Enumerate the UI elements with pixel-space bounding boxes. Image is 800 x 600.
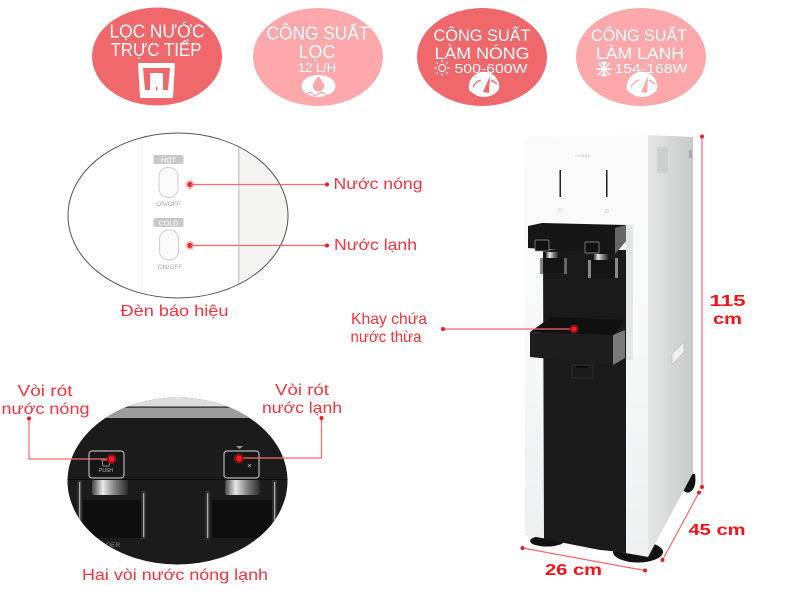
badge: công suất làm lạnh: LÀM LẠNH bbox=[596, 44, 684, 63]
cabinet side bbox=[648, 135, 693, 557]
badge: công suất lọc: CÔNG SUẤT bbox=[266, 22, 370, 44]
icon: snowflake bbox=[596, 61, 612, 77]
feet bbox=[530, 474, 695, 562]
badge: công suất làm nóng bbox=[417, 8, 547, 106]
label: vòi rót nước nóng bbox=[2, 383, 116, 464]
callout: nước nóng bbox=[186, 176, 422, 193]
faucet right bbox=[205, 446, 277, 540]
panel shadow bbox=[626, 225, 633, 360]
callout: khay chứa nước thừa bbox=[350, 311, 578, 346]
drip tray bbox=[530, 317, 625, 378]
callout: khay chứa nước thừa: Khay chứa bbox=[351, 311, 427, 328]
dimension: height 115 cm: 115 bbox=[710, 293, 746, 310]
panel: faucet zoom circle bbox=[68, 398, 288, 564]
icon: water filter bbox=[138, 63, 175, 98]
label: vòi rót nước lạnh: Vòi rót bbox=[275, 382, 330, 399]
badge: công suất làm nóng: CÔNG SUẤT bbox=[434, 26, 530, 45]
badge: công suất làm nóng: 500-600W bbox=[454, 61, 528, 76]
callout: nước lạnh bbox=[186, 237, 417, 254]
dimension: width 26 cm: 26 cm bbox=[545, 562, 602, 579]
dimension: width 26 cm bbox=[520, 546, 647, 579]
indicator slits bbox=[558, 170, 608, 212]
dimension: height 115 cm bbox=[700, 134, 746, 489]
hot indicator button: ON/OFF bbox=[156, 201, 181, 208]
badge: công suất làm nóng: LÀM NÓNG bbox=[434, 44, 530, 63]
icon: gauge bbox=[469, 72, 499, 97]
faucet left: PUSH bbox=[99, 468, 113, 474]
caption: hai vòi nước nóng lạnh: Hai vòi nước nóng lạnh bbox=[82, 567, 268, 584]
callout: nước nóng: Nước nóng bbox=[334, 176, 422, 193]
callout: nước lạnh: Nước lạnh bbox=[334, 237, 417, 254]
icon: gauge bbox=[627, 72, 657, 97]
caption: đèn báo hiệu: Đèn báo hiệu bbox=[120, 303, 228, 320]
badge: công suất làm lạnh bbox=[576, 8, 706, 106]
panel: đèn báo hiệu zoom circle bbox=[68, 133, 299, 299]
cold indicator button: ON/OFF bbox=[158, 264, 182, 271]
cold indicator button bbox=[154, 218, 184, 271]
black front panel bbox=[543, 250, 626, 553]
cabinet front bbox=[524, 135, 648, 557]
icon: sun bbox=[434, 60, 450, 76]
badge: công suất lọc: LỌC bbox=[298, 42, 336, 62]
badge: công suất làm lạnh: 154-168W bbox=[614, 61, 688, 76]
product: water purifier bbox=[524, 135, 695, 562]
dimension: height 115 cm: cm bbox=[713, 311, 742, 328]
callout: khay chứa nước thừa: nước thừa bbox=[350, 329, 422, 346]
label: vòi rót nước lạnh: nước lạnh bbox=[262, 400, 342, 417]
badge: lọc nước trực tiếp: TRỰC TIẾP bbox=[110, 39, 202, 60]
faucet left bbox=[77, 451, 146, 539]
label: vòi rót nước nóng: nước nóng bbox=[2, 401, 90, 418]
panel: faucet zoom circle: GER bbox=[106, 542, 120, 549]
dimension: depth 45 cm bbox=[660, 490, 746, 562]
brand: coway bbox=[575, 153, 591, 158]
badge: công suất lọc bbox=[253, 8, 383, 106]
dispenser head bbox=[528, 223, 626, 278]
badge: lọc nước trực tiếp bbox=[92, 8, 222, 106]
hot indicator button: HOT bbox=[161, 158, 177, 164]
side vent bbox=[672, 342, 684, 365]
badge: công suất làm lạnh: CÔNG SUẤT bbox=[591, 26, 687, 45]
hot indicator button bbox=[154, 155, 184, 208]
dimension: depth 45 cm: 45 cm bbox=[688, 522, 746, 539]
label: vòi rót nước nóng: Vòi rót bbox=[18, 383, 73, 400]
icon: water drop bbox=[302, 75, 336, 97]
cold indicator button: COLD bbox=[159, 220, 178, 228]
side label bbox=[657, 147, 668, 173]
badge: lọc nước trực tiếp: LỌC NƯỚC bbox=[110, 20, 204, 42]
badge: công suất lọc: 12 L/H bbox=[298, 60, 336, 75]
label: vòi rót nước lạnh bbox=[234, 382, 342, 464]
